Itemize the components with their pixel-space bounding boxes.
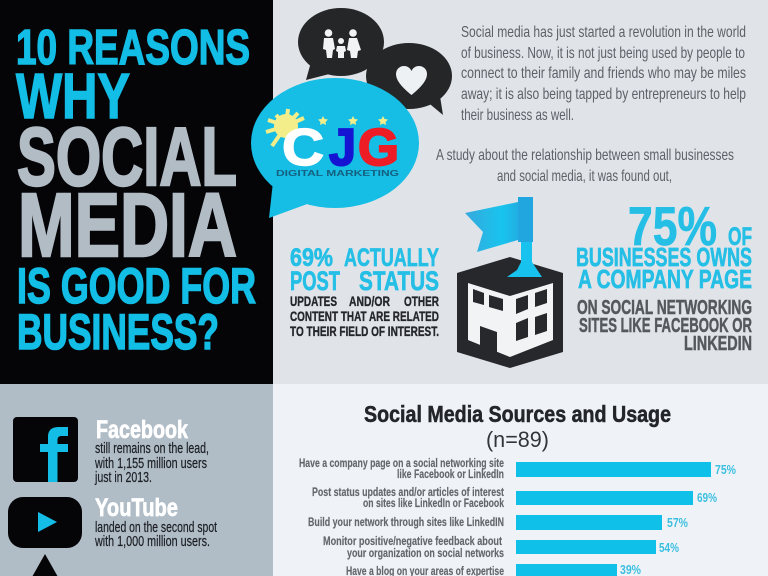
- icon: youtube: [8, 497, 82, 548]
- bar row: monitor feedback 54 percent: [323, 536, 679, 560]
- bar row: status updates 69 percent: Post status updates and/or articles of interest: [312, 487, 504, 499]
- callout: 75 percent company page: OF: [728, 223, 752, 251]
- title line: 10 reasons: 10 REASONS: [16, 21, 250, 75]
- bar row: build network 57 percent: 57%: [667, 516, 688, 530]
- text block: study intro: and social media, it was found out,: [497, 168, 672, 185]
- text block: facebook description: with 1,155 million users: [94, 456, 207, 472]
- callout: 69 percent post status: STATUS: [359, 266, 439, 296]
- bar row: monitor feedback 54 percent: Monitor positive/negative feedback about: [323, 536, 502, 548]
- text block: study intro: [436, 147, 734, 185]
- text block: youtube description: [94, 520, 217, 550]
- bar row: company page 75 percent: [299, 458, 736, 481]
- callout: 75 percent company page: [576, 195, 752, 355]
- text block: facebook description: [94, 441, 209, 486]
- bar row: status updates 69 percent: on sites like LinkedIn or Facebook: [363, 498, 504, 510]
- callout: 69 percent post status: [290, 244, 439, 339]
- chart heading: Social Media Sources and Usage: [364, 401, 671, 427]
- heading: facebook: Facebook: [96, 416, 188, 444]
- logo stars: [318, 116, 388, 125]
- text block: facebook description: still remains on the lead,: [95, 441, 209, 457]
- bar row: blog 39 percent: [346, 563, 641, 576]
- bar row: company page 75 percent: 75%: [715, 463, 736, 477]
- callout: 69 percent post status: 69%: [290, 244, 333, 272]
- bar row: company page 75 percent: like Facebook or LinkedIn: [397, 469, 504, 481]
- panel: social media sources and usage chart: [299, 401, 736, 576]
- bar row: monitor feedback 54 percent: 54%: [659, 541, 679, 555]
- panel: title: [0, 0, 273, 384]
- text block: youtube description: with 1,000 million users.: [94, 534, 210, 550]
- logo letters: J: [329, 119, 356, 177]
- callout: 75 percent company page: 75%: [628, 195, 717, 257]
- logo letters: C: [282, 119, 324, 177]
- title line: why: WHY: [16, 60, 130, 132]
- logo: CJG digital marketing bubble: [251, 78, 419, 218]
- icon: cropped triangle: [32, 554, 58, 576]
- panel: youtube stat: [8, 494, 217, 550]
- bar row: monitor feedback 54 percent: your organization on social networks: [347, 548, 504, 560]
- chart sample size: (n=89): [486, 427, 549, 452]
- title line: media: MEDIA: [18, 176, 237, 276]
- callout: 69 percent post status: OTHER: [404, 294, 439, 309]
- text block: intro paragraph: their business as well.: [461, 107, 574, 124]
- bar row: build network 57 percent: Build your network through sites like LinkedIN: [308, 517, 504, 529]
- panel: facebook stat: [13, 416, 209, 486]
- callout: 69 percent post status: CONTENT THAT ARE RELATED: [290, 309, 439, 324]
- callout: 69 percent post status: UPDATES: [290, 294, 337, 309]
- icon: facebook: [13, 417, 78, 482]
- logo letters: [282, 119, 399, 177]
- title line: business: BUSINESS?: [17, 304, 219, 360]
- heading: youtube: YouTube: [95, 494, 178, 522]
- icon: building with flag: [457, 197, 563, 368]
- text block: youtube description: landed on the second spot: [95, 520, 217, 536]
- callout: 69 percent post status: POST: [290, 266, 340, 296]
- logo tagline: DIGITAL MARKETING: [276, 169, 399, 178]
- bar row: status updates 69 percent: [312, 487, 717, 510]
- text block: intro paragraph: [461, 24, 746, 124]
- logo letters: G: [358, 119, 399, 177]
- title line: is good for: IS GOOD FOR: [17, 258, 256, 314]
- logo sun: [266, 109, 304, 146]
- title line: social: SOCIAL: [17, 110, 237, 203]
- bar row: status updates 69 percent: 69%: [697, 491, 717, 505]
- bar row: build network 57 percent: [308, 515, 688, 530]
- callout: 69 percent post status: AND/OR: [349, 294, 390, 309]
- bar row: company page 75 percent: Have a company page on a social networking site: [299, 458, 504, 470]
- text block: facebook description: just in 2013.: [94, 470, 152, 486]
- icon: family chat bubble: [298, 8, 384, 80]
- icon: heart chat bubble: [366, 43, 452, 115]
- callout: 69 percent post status: ACTUALLY: [344, 244, 439, 272]
- callout: 69 percent post status: TO THEIR FIELD OF INTEREST.: [290, 324, 439, 339]
